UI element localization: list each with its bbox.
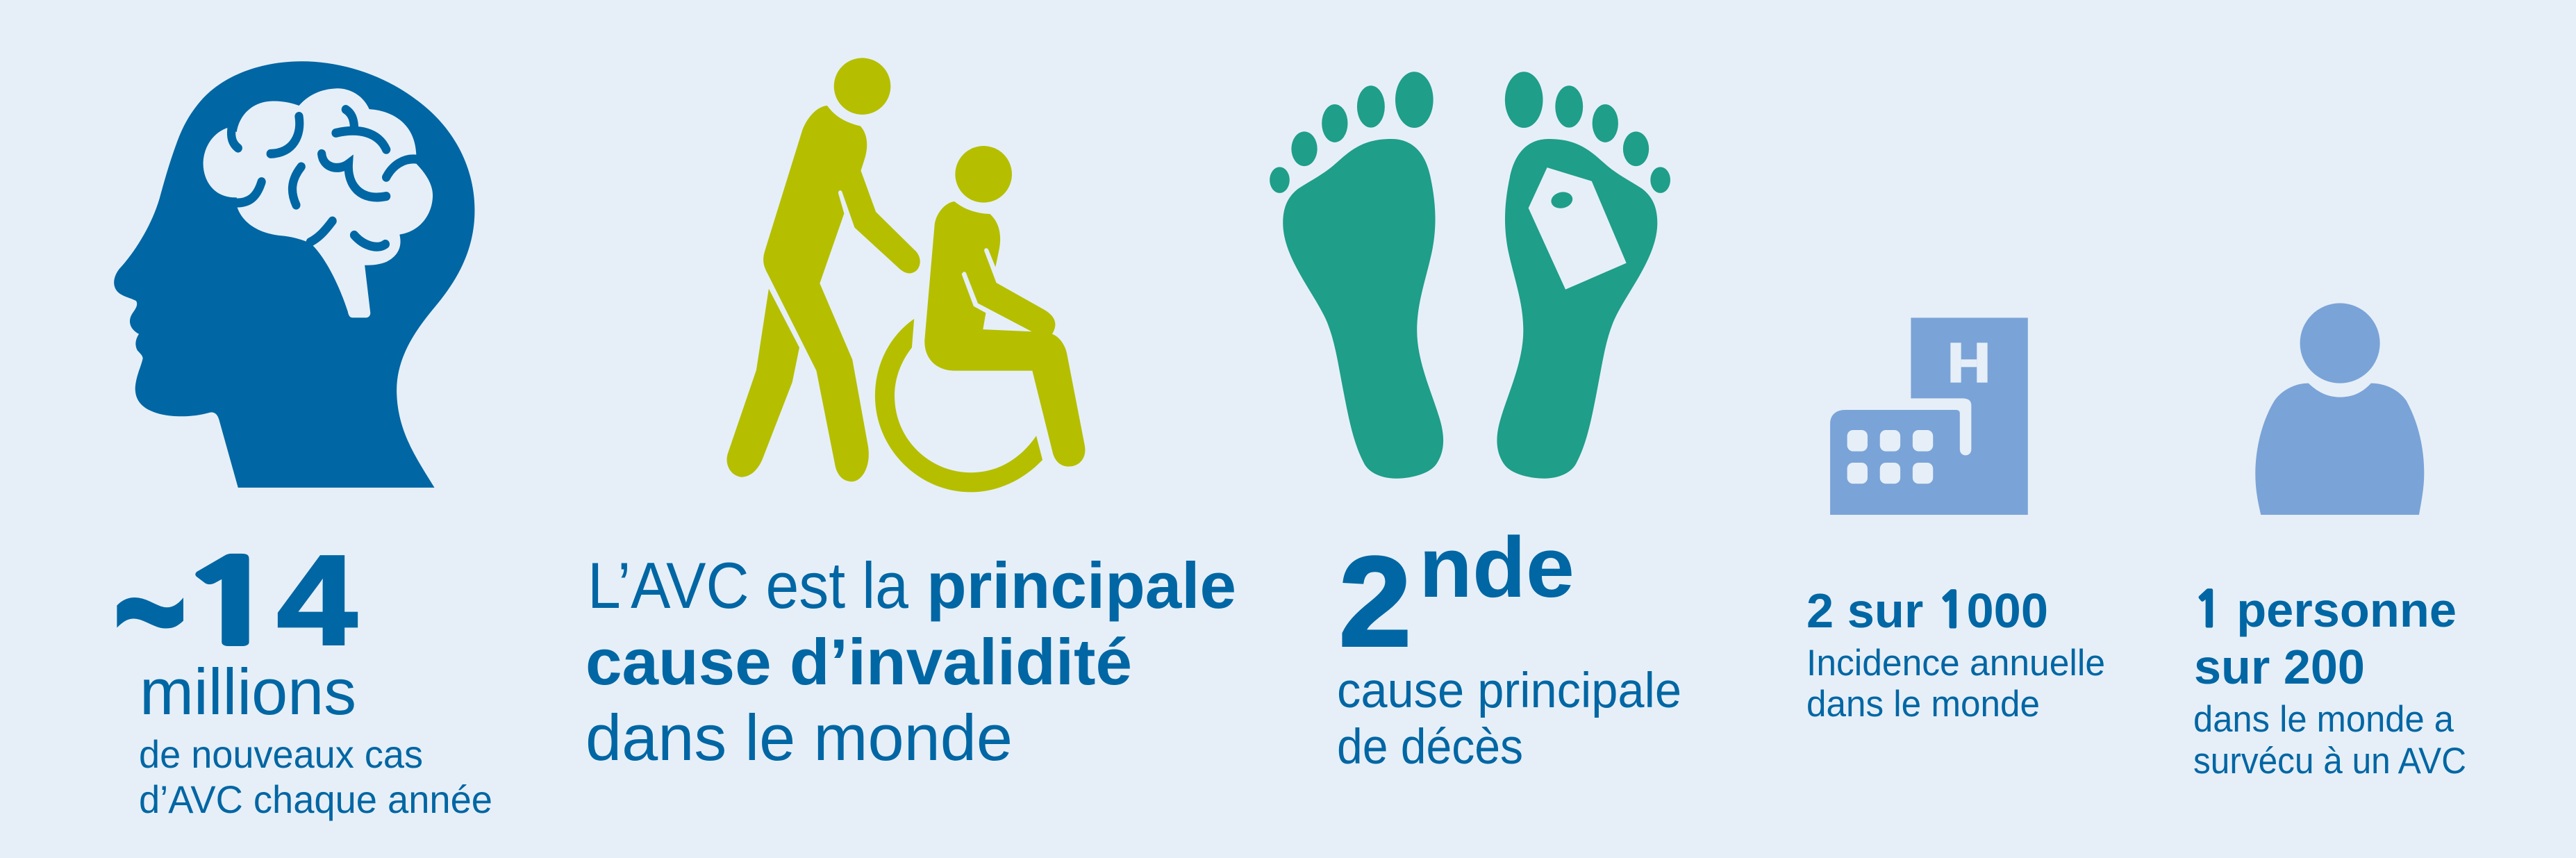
cause of death text — [1337, 663, 1681, 775]
icon: person — [2255, 303, 2424, 515]
panel: cause of death — [1270, 72, 1681, 775]
big ordinal 2nde: nde — [1419, 520, 1574, 616]
incidence description — [1806, 643, 2105, 725]
panel: new stroke cases — [113, 61, 492, 821]
cause of death text: de décès — [1337, 720, 1523, 775]
big number 14: 4 — [277, 529, 357, 671]
survivors description: survécu à un AVC — [2193, 741, 2466, 782]
panel: annual incidence — [1806, 317, 2105, 725]
incidence description: dans le monde — [1806, 684, 2040, 725]
icon: person pushing wheelchair — [727, 58, 1085, 492]
cause of death text: cause principale — [1337, 663, 1681, 718]
survivors description: dans le monde a — [2193, 699, 2454, 740]
incidence headline: 2 sur 1000 — [1806, 584, 2048, 638]
millions label: millions — [140, 655, 356, 728]
disability text: cause d’invalidité — [585, 625, 1132, 698]
survivors headline: sur 200 — [2194, 640, 2365, 694]
incidence description: Incidence annuelle — [1806, 643, 2105, 684]
big number 14 — [176, 529, 357, 671]
panel: survivors — [2193, 303, 2466, 782]
tilde sign: ~ — [113, 513, 187, 707]
new cases line 2: d’AVC chaque année — [139, 777, 492, 821]
panel: disability — [585, 58, 1236, 774]
disability text: principale — [926, 549, 1236, 622]
disability text: L’AVC est la — [588, 549, 909, 622]
icon: hospital — [1830, 317, 2028, 515]
survivors description — [2193, 699, 2466, 782]
big ordinal 2nde: 2 — [1339, 530, 1411, 673]
big number 14: 1 — [176, 546, 287, 661]
disability text — [585, 549, 1236, 774]
disability text: dans le monde — [585, 701, 1013, 774]
survivors headline — [2193, 583, 2457, 694]
icon: feet with toe tag — [1270, 72, 1670, 479]
survivors headline: 1 personne — [2193, 583, 2457, 637]
icon: head with brain — [114, 61, 474, 488]
new cases line 1: de nouveaux cas — [139, 732, 423, 776]
big ordinal 2nde — [1339, 520, 1574, 673]
